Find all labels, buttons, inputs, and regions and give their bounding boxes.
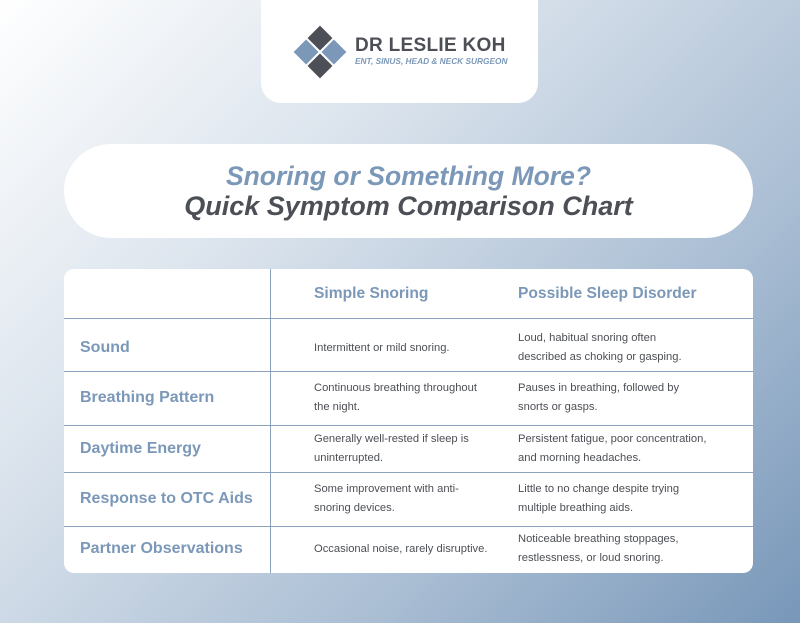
comparison table bbox=[64, 269, 753, 573]
comparison table: Pauses in breathing, followed by bbox=[518, 382, 679, 394]
row: breathing pattern: Breathing Pattern bbox=[80, 389, 214, 406]
comparison table: Loud, habitual snoring often bbox=[518, 332, 656, 344]
comparison table: the night. bbox=[314, 401, 360, 413]
title pill bbox=[64, 144, 753, 238]
comparison table: snoring devices. bbox=[314, 502, 395, 514]
comparison table: Persistent fatigue, poor concentration, bbox=[518, 433, 706, 445]
comparison table: described as choking or gasping. bbox=[518, 351, 682, 363]
comparison table: Noticeable breathing stoppages, bbox=[518, 533, 678, 545]
comparison table: Some improvement with anti- bbox=[314, 483, 459, 495]
comparison table: Intermittent or mild snoring. bbox=[314, 342, 450, 354]
icon: diamond logo bbox=[294, 26, 346, 78]
comparison table: and morning headaches. bbox=[518, 452, 641, 464]
comparison table: Little to no change despite trying bbox=[518, 483, 679, 495]
comparison table: Generally well-rested if sleep is bbox=[314, 433, 469, 445]
logo tagline: ENT, SINUS, HEAD & NECK SURGEON bbox=[355, 56, 507, 66]
header: possible sleep disorder: Possible Sleep Disorder bbox=[518, 285, 697, 302]
comparison table: Continuous breathing throughout bbox=[314, 382, 477, 394]
header: simple snoring: Simple Snoring bbox=[314, 285, 428, 302]
row: response to OTC aids: Response to OTC Aids bbox=[80, 490, 253, 507]
comparison table: multiple breathing aids. bbox=[518, 502, 633, 514]
row: partner observations: Partner Observations bbox=[80, 540, 243, 557]
logo text: DR LESLIE KOH bbox=[355, 35, 506, 56]
row: sound: Sound bbox=[80, 339, 130, 356]
comparison table: restlessness, or loud snoring. bbox=[518, 552, 664, 564]
comparison table: uninterrupted. bbox=[314, 452, 383, 464]
title line 1: Snoring or Something More? bbox=[226, 161, 591, 191]
logo card bbox=[261, 0, 538, 103]
comparison table: Occasional noise, rarely disruptive. bbox=[314, 543, 487, 555]
row: daytime energy: Daytime Energy bbox=[80, 440, 201, 457]
comparison table: snorts or gasps. bbox=[518, 401, 598, 413]
title line 2: Quick Symptom Comparison Chart bbox=[184, 191, 633, 221]
